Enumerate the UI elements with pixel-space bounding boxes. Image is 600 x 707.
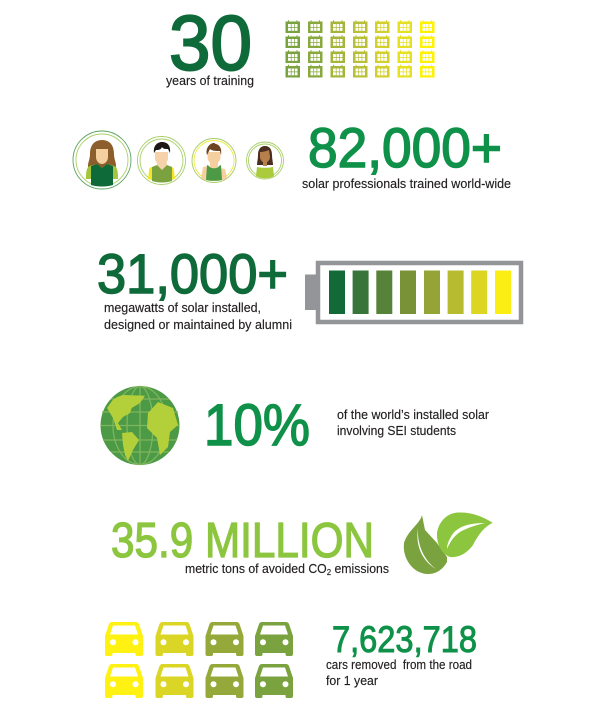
heading: 7,623,718: 7,623,718 [332, 618, 477, 660]
icon: man with black hair [138, 136, 186, 184]
icon: battery [305, 263, 521, 322]
icon: globe [100, 386, 180, 465]
text: megawatts of solar installed [104, 301, 292, 332]
text: metric tons: 2 [327, 568, 332, 577]
text: megawatts of solar installed: megawatts of solar installed, [104, 301, 261, 315]
text: cars removed: cars removed from the road [326, 658, 472, 672]
text: world's installed solar [337, 408, 489, 438]
icon: man with brown hair [192, 138, 236, 182]
text: megawatts of solar installed: designed or maintained by alumni [104, 318, 292, 332]
heading: 31,000+: 31,000+ [97, 242, 288, 305]
icon: woman with long brown hair [73, 131, 131, 189]
icon: woman with dark hair [246, 142, 284, 179]
icon grid: cars [105, 622, 293, 698]
text: metric tons: emissions [331, 562, 389, 576]
text: cars removed: for 1 year [326, 674, 378, 688]
battery cells [329, 270, 511, 314]
icon: leaves [404, 512, 493, 574]
heading: 10%: 10% [204, 393, 310, 458]
text: world's installed solar: involving SEI students [337, 424, 456, 438]
text: cars removed [326, 658, 472, 688]
heading: 35.9 MILLION: 35.9 MILLION [111, 514, 374, 568]
text: world's installed solar: of the world’s installed solar [337, 408, 489, 422]
heading: 82,000+: 82,000+ [308, 116, 502, 179]
heading: 30: 30 [169, 0, 252, 86]
text: solar professionals: solar professionals trained world-wide [302, 177, 511, 191]
text: metric tons: metric tons of avoided CO [185, 562, 330, 576]
icon grid: calendars [286, 20, 434, 78]
text: years of training: years of training [166, 74, 254, 88]
